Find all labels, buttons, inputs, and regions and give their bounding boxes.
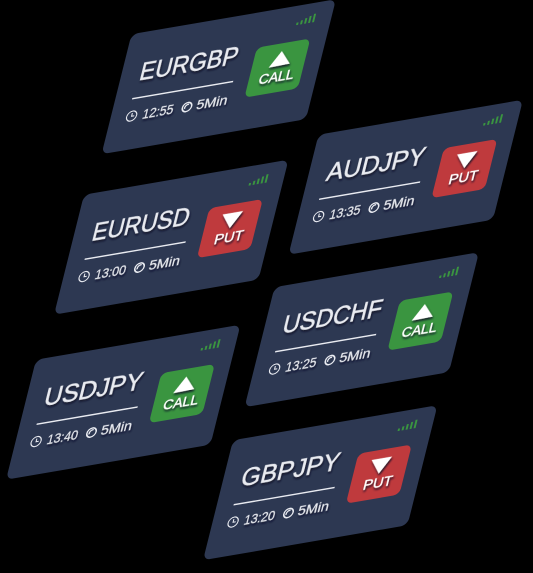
panel: EURGBP signal card (102, 0, 336, 154)
icon: clock (268, 363, 281, 375)
heading: pair name: AUDJPY (324, 143, 429, 187)
heading: pair name: EURGBP (137, 42, 242, 86)
button: CALL (149, 364, 215, 423)
button: PUT: PUT (447, 168, 480, 188)
duration: 5Min (296, 498, 331, 518)
icon: duration (324, 355, 336, 365)
panel: EURUSD signal card (54, 160, 288, 315)
panel: USDCHF signal card (244, 252, 479, 407)
panel: USDJPY signal card (6, 325, 240, 480)
icon: clock (78, 271, 90, 282)
duration: 5Min (99, 418, 134, 438)
button: CALL: CALL (161, 392, 200, 414)
time: 13:40 (45, 427, 80, 447)
icon: clock (125, 110, 138, 122)
duration: 5Min (382, 193, 416, 213)
duration: 5Min (147, 253, 182, 273)
button: PUT: PUT (212, 228, 245, 248)
time: 13:25 (284, 355, 318, 375)
signal strength bars (296, 14, 316, 25)
icon: duration (368, 202, 380, 213)
button: PUT (197, 199, 263, 258)
signal strength bars (439, 267, 459, 278)
panel: GBPJPY signal card (203, 405, 438, 560)
duration: 5Min (195, 92, 229, 112)
signal strength bars (398, 420, 418, 431)
heading: pair name: EURUSD (89, 203, 193, 247)
panel: AUDJPY signal card (288, 100, 523, 255)
button: CALL: CALL (257, 67, 296, 88)
duration: 5Min (338, 345, 372, 365)
button: CALL (244, 38, 310, 98)
icon: clock (312, 211, 325, 222)
button: CALL: CALL (400, 320, 439, 341)
heading: pair name: USDCHF (280, 295, 386, 339)
heading: pair name: USDJPY (41, 368, 146, 412)
icon: duration (134, 262, 145, 273)
icon: duration (181, 102, 193, 112)
signal strength bars (200, 339, 221, 351)
button: PUT (346, 444, 412, 504)
icon: duration (86, 427, 97, 438)
icon: clock (227, 516, 239, 528)
button: CALL (387, 291, 453, 351)
signal strength bars (483, 114, 503, 126)
button: PUT: PUT (361, 473, 394, 494)
time: 12:55 (141, 102, 175, 122)
time: 13:00 (93, 262, 128, 282)
icon: clock (30, 436, 42, 447)
time: 13:35 (328, 202, 362, 222)
time: 13:20 (242, 508, 277, 528)
heading: pair name: GBPJPY (238, 448, 343, 492)
signal strength bars (248, 174, 269, 186)
icon: duration (283, 508, 294, 518)
button: PUT (431, 139, 497, 198)
